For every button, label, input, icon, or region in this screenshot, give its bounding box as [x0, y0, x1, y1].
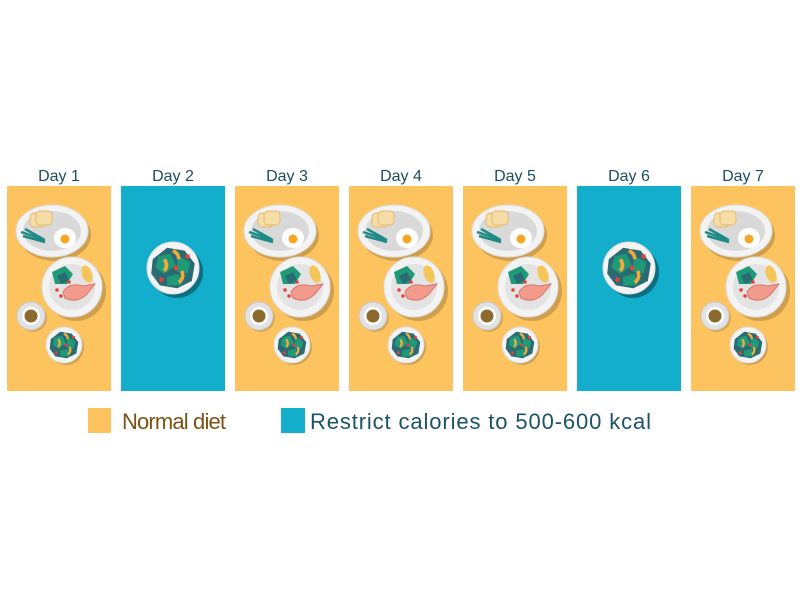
legend: normal diet: Normal diet — [122, 409, 226, 434]
day labels: Day 5 — [494, 168, 536, 185]
panel: day 1 — [7, 186, 111, 391]
day labels: Day 2 — [152, 168, 194, 185]
panel: day 2 — [121, 186, 225, 391]
day labels: Day 7 — [722, 168, 764, 185]
legend: restrict calories: Restrict calories to 500-600 kcal — [310, 409, 651, 434]
day labels — [38, 168, 764, 185]
panel: day 6 — [577, 186, 681, 391]
day labels: Day 6 — [608, 168, 650, 185]
day labels: Day 3 — [266, 168, 308, 185]
day labels: Day 1 — [38, 168, 80, 185]
panel: day 4 — [349, 186, 453, 391]
panel: day 3 — [235, 186, 339, 391]
panel: day 5 — [463, 186, 567, 391]
panel: day 7 — [691, 186, 795, 391]
day labels: Day 4 — [380, 168, 422, 185]
